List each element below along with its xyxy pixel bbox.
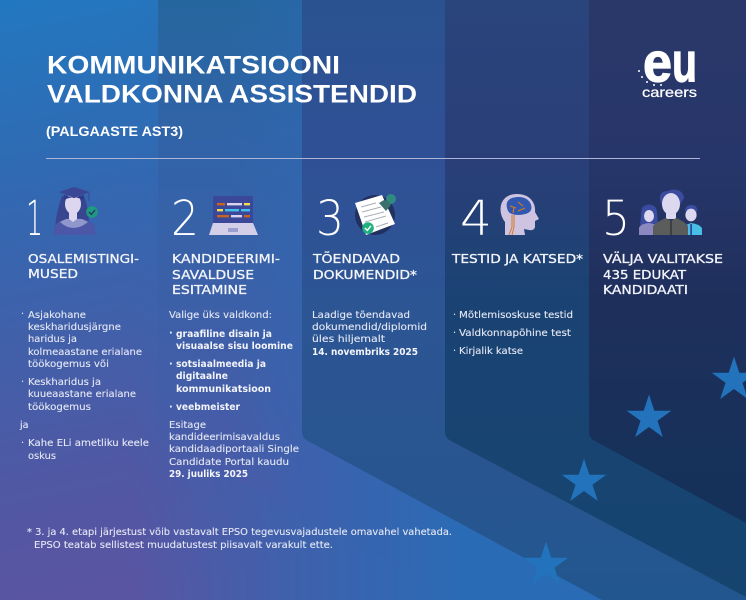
subtitle: (PALGAASTE AST3) [46,124,183,139]
icon: group of people [639,190,702,235]
step 5: heading: KANDIDAATI [603,282,688,297]
step 2: text: kandideerimisavaldus [169,432,280,443]
icon: head with brain [501,194,539,235]
footnote: EPSO teatab sellistest muudatustest piisavalt varakult ette. [34,540,333,551]
icon: laptop [209,196,258,235]
step 1: text: töökogemus või [28,359,109,370]
step 3: text: Laadige tõendavad [312,310,410,321]
panel: step 3 backdrop [302,0,746,600]
step 3: heading: DOKUMENDID* [313,267,417,282]
step 2: text: 29. juuliks 2025 [169,469,248,480]
step 2: text: sotsiaalmeedia ja [176,359,266,370]
step 1: text: töökogemus [28,402,91,413]
step 3: text: üles hiljemalt [312,334,385,345]
icon: graduate [54,187,98,235]
step 3: text [312,310,427,358]
step 1: text: ja [19,420,29,431]
step 1: text: · [21,377,24,388]
step 2: text: · [169,359,173,370]
step 1: text: keskharidusjärgne [28,322,121,333]
title [47,52,417,108]
step 1: text: kolmeaastane erialane [28,347,142,358]
panel: step 5 backdrop [589,0,746,523]
panel: step 4 backdrop [445,0,746,597]
step 4: list [453,310,573,357]
step 4: list: · [453,346,456,357]
panel: step 2 backdrop [158,0,746,600]
icon: document with stamp [355,194,396,235]
step 3: text: 14. novembriks 2025 [312,347,418,358]
step 1: text: · [21,309,24,320]
step 2: text: graafiline disain ja [176,329,272,340]
step 1: heading: MUSED [28,266,78,281]
step 2: text: kommunikatsioon [176,384,271,395]
step 3: heading: TÕENDAVAD [312,251,400,266]
step 2: text: kandidaadiportaali Single [169,444,299,455]
step 1: text [19,309,149,462]
step 2: text: digitaalne [176,371,228,382]
step 2: text: Candidate Portal kaudu [169,457,289,468]
step 4: list: · [453,328,456,339]
step 3: number: 3 [316,191,344,247]
footnote: * 3. ja 4. etapi järjestust võib vastavalt EPSO tegevusvajadustele omavahel vahetada. [27,527,452,538]
step 4: number: 4 [460,191,492,247]
step 1: text: kuueaastane erialane [28,389,136,400]
step 2: text: Valige üks valdkond: [169,310,272,321]
step 5: heading [603,251,723,297]
logo: EU careers: careers [642,84,697,100]
step 2: heading [172,251,280,297]
logo: EU careers: u [672,30,697,94]
step 4: list: Mõtlemisoskuse testid [459,310,573,321]
step 2: text: · [169,328,173,339]
step 1: text: Keskharidus ja [28,377,101,388]
step 1: number: 1 [26,191,43,247]
step 4: list: Valdkonnapõhine test [459,328,571,339]
logo: EU careers [638,30,697,100]
step 2: heading: KANDIDEERIMI- [172,251,280,266]
step 4: list: Kirjalik katse [459,346,523,357]
title: VALDKONNA ASSISTENDID [47,80,417,108]
step 1: text: Asjakohane [28,310,86,321]
step 2: text [169,310,299,480]
logo: EU careers: e [643,30,672,94]
step 2: heading: ESITAMINE [172,282,247,297]
step 2: number: 2 [171,191,199,247]
step 1: text: Kahe ELi ametliku keele [28,438,149,449]
step 5: heading: VÄLJA VALITAKSE [603,251,723,266]
step 1: heading [28,251,139,281]
step 1: text: haridus ja [28,334,77,345]
step 2: text: · [169,402,173,413]
step 2: text: Esitage [169,420,206,431]
footnote [27,527,452,551]
title: KOMMUNIKATSIOONI [47,52,340,80]
step 5: heading: 435 EDUKAT [603,267,686,282]
step 1: text: oskus [28,451,56,462]
step 3: text: dokumendid/diplomid [312,322,427,333]
decorative EU stars [524,356,746,584]
step 4: heading: TESTID JA KATSED* [451,251,583,266]
step 3: heading [312,251,417,282]
step 2: heading: SAVALDUSE [172,267,254,282]
step 1: heading: OSALEMISTINGI- [28,251,139,266]
step 4: list: · [453,310,456,321]
step 1: text: · [21,438,24,449]
step 2: text: veebmeister [176,402,240,413]
step 5: number: 5 [602,191,630,247]
step 2: text: visuaalse sisu loomine [176,341,293,352]
